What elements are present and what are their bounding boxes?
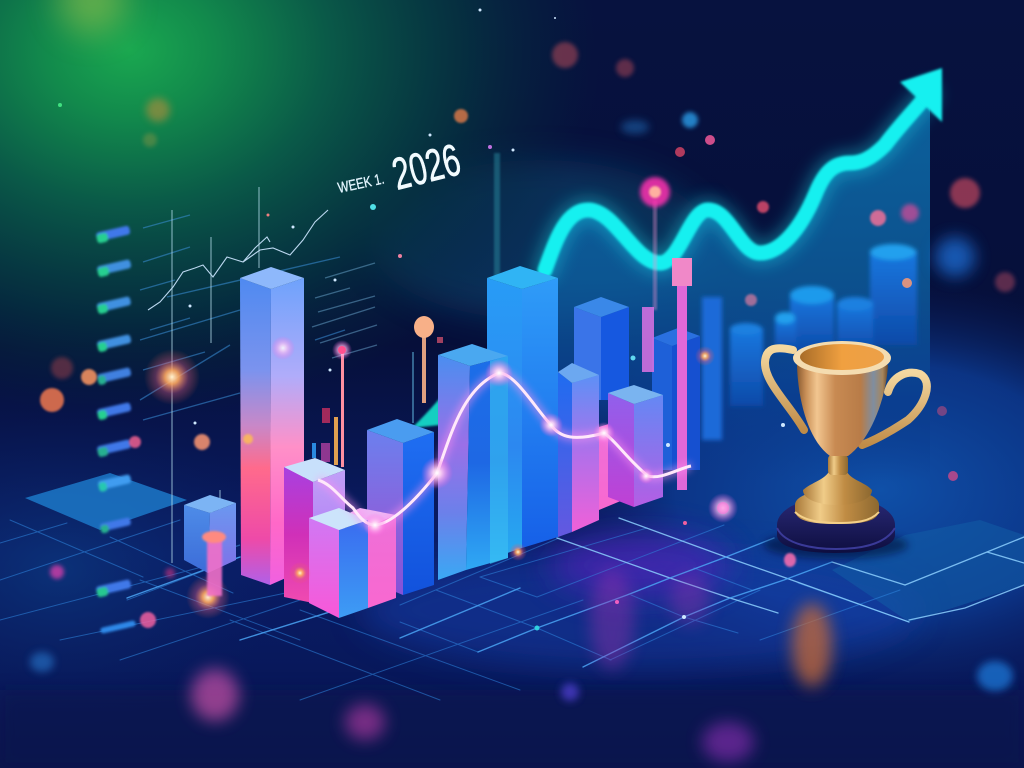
rising cyan trend arrow bbox=[545, 68, 942, 270]
bar: short blue bbox=[558, 363, 599, 537]
glowing floor arrow bbox=[202, 531, 226, 596]
teal line behind bars bbox=[412, 398, 440, 428]
left data panel bbox=[96, 187, 377, 634]
post bar bbox=[702, 297, 722, 440]
line chart bbox=[148, 210, 328, 310]
back bar 2 bbox=[652, 328, 700, 470]
floor reflections bbox=[30, 570, 1013, 762]
trophy dark base bbox=[777, 497, 895, 553]
bar: tall blue bbox=[487, 266, 558, 560]
bright glow points bbox=[144, 177, 738, 619]
cup interior bbox=[800, 344, 884, 370]
purple floor glow bbox=[550, 533, 730, 597]
text rows bbox=[312, 263, 377, 358]
bar: tall bbox=[240, 267, 304, 585]
left handle bbox=[765, 348, 804, 430]
perspective floor grid bbox=[0, 518, 1024, 700]
glowing line chart bbox=[318, 373, 691, 525]
background bars right bbox=[702, 244, 917, 440]
legend dashes bbox=[96, 225, 136, 634]
bar: front bbox=[309, 508, 368, 618]
cylinder mid bbox=[837, 297, 873, 353]
chart data points bbox=[243, 336, 654, 584]
heading: week 2026 bbox=[336, 134, 465, 200]
bar: pink middle bbox=[345, 508, 396, 608]
floor tile right bbox=[832, 520, 1024, 622]
heading: week 2026: WEEK 1. bbox=[336, 171, 386, 197]
bar: purple back bbox=[284, 458, 345, 603]
bright grid lines bbox=[557, 518, 1024, 622]
cup rim bbox=[793, 341, 891, 375]
small candles bbox=[312, 316, 443, 467]
cylinder small bbox=[775, 312, 796, 353]
area under trend line bbox=[540, 95, 930, 480]
vertical teal post bbox=[494, 153, 500, 278]
particles bbox=[58, 8, 785, 630]
floor tile left bbox=[25, 473, 187, 530]
heading: week 2026: 2026 bbox=[387, 134, 465, 200]
right handle bbox=[862, 373, 927, 445]
cylinder wide bbox=[790, 286, 834, 353]
pink candle bbox=[642, 307, 654, 372]
blue glow right bbox=[935, 237, 975, 277]
bokeh lights bbox=[40, 42, 1015, 628]
trophy gold base bbox=[795, 455, 879, 524]
mid grid lines bbox=[127, 538, 832, 667]
cylinder far right bbox=[870, 244, 917, 345]
cylinder near bbox=[730, 323, 763, 406]
bar: blue mid-left bbox=[367, 419, 434, 595]
trophy shadow bbox=[764, 531, 908, 559]
back bars bbox=[574, 297, 700, 470]
bar: small pink back bbox=[599, 423, 623, 510]
pink pin marker bbox=[672, 258, 692, 490]
thin pink stem bbox=[653, 200, 657, 310]
faint grid lines bbox=[0, 520, 909, 700]
back bar 1 bbox=[574, 297, 629, 400]
panel lines bbox=[140, 215, 345, 555]
bar: right purple bbox=[608, 385, 663, 507]
cup body bbox=[797, 365, 888, 456]
bar: small left bbox=[184, 495, 236, 573]
bar: mid blue bbox=[438, 344, 508, 580]
trophy bbox=[764, 341, 927, 559]
axis lines bbox=[172, 187, 259, 563]
